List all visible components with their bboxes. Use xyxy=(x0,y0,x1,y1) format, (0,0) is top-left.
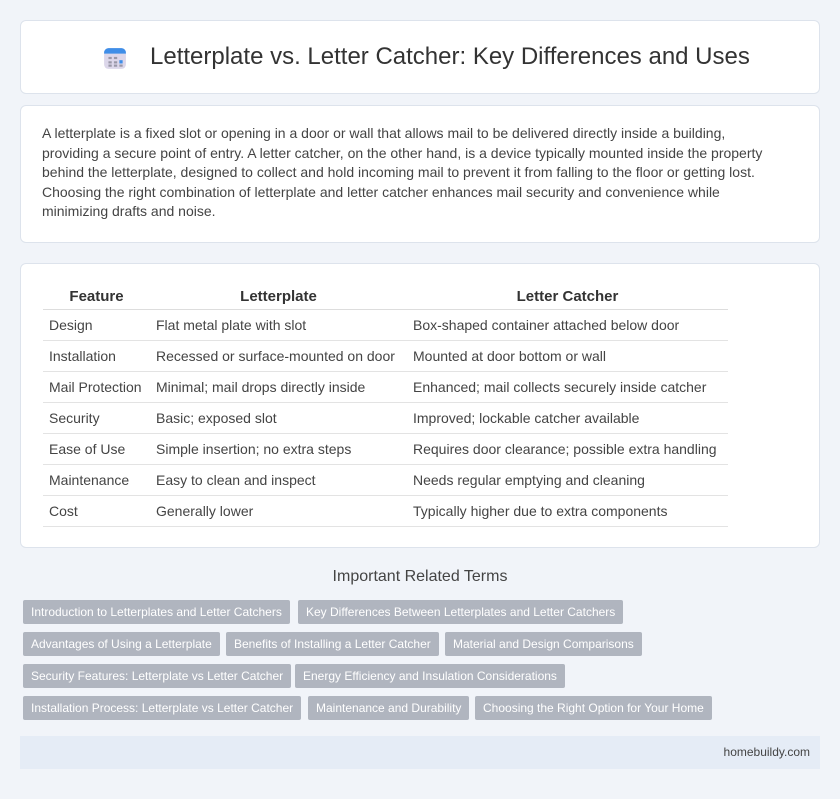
related terms tags: Energy Efficiency and Insulation Considerations xyxy=(303,669,557,683)
intro text card xyxy=(20,105,820,243)
related terms tags: Advantages of Using a Letterplate xyxy=(31,637,212,651)
related terms tags: Choosing the Right Option for Your Home xyxy=(483,701,704,715)
comparison table card: Easy to clean and inspect xyxy=(156,472,316,488)
related terms heading: Important Related Terms xyxy=(333,568,507,585)
comparison table card: Security xyxy=(49,410,100,426)
footer xyxy=(20,736,820,769)
comparison table card: Flat metal plate with slot xyxy=(156,317,306,333)
related terms tags: Benefits of Installing a Letter Catcher xyxy=(234,637,431,651)
comparison table card: Recessed or surface-mounted on door xyxy=(156,348,395,364)
related terms tags: Security Features: Letterplate vs Letter Catcher xyxy=(31,669,283,683)
comparison table card: Generally lower xyxy=(156,503,253,519)
comparison table card: Minimal; mail drops directly inside xyxy=(156,379,365,395)
comparison table card: Design xyxy=(49,317,93,333)
related terms tags: Introduction to Letterplates and Letter Catchers xyxy=(31,605,282,619)
title: Letterplate vs. Letter Catcher: Key Differences and Uses xyxy=(150,43,750,70)
comparison table card: Improved; lockable catcher available xyxy=(413,410,639,426)
comparison table card: Simple insertion; no extra steps xyxy=(156,441,351,457)
comparison table card: Box-shaped container attached below door xyxy=(413,317,679,333)
comparison table card: Enhanced; mail collects securely inside catcher xyxy=(413,379,706,395)
comparison table card: Mounted at door bottom or wall xyxy=(413,348,606,364)
intro text card: A letterplate is a fixed slot or opening in a door or wall that allows mail to be delivered directly inside a building, providing a secure point of entry. A letter catcher, on the other hand, is a device typically mounted inside the property behind the letterplate, designed to collect and hold incoming mail to prevent it from falling to the floor or getting lost. Choosing the right combination of letterplate and letter catcher enhances mail security and convenience while minimizing drafts and noise. xyxy=(42,125,762,219)
comparison table card: Typically higher due to extra components xyxy=(413,503,667,519)
comparison table card: Installation xyxy=(49,348,116,364)
comparison table card: Ease of Use xyxy=(49,441,125,457)
comparison table card: Feature xyxy=(69,288,124,305)
related terms tags: Installation Process: Letterplate vs Letter Catcher xyxy=(31,701,293,715)
header card xyxy=(20,20,820,94)
comparison table card: Cost xyxy=(49,503,78,519)
comparison table card: Mail Protection xyxy=(49,379,142,395)
comparison table card: Needs regular emptying and cleaning xyxy=(413,472,645,488)
footer: homebuildy.com xyxy=(724,745,810,759)
comparison table card: Requires door clearance; possible extra handling xyxy=(413,441,717,457)
comparison table card xyxy=(20,263,820,548)
icon: calendar xyxy=(104,48,126,69)
comparison table card: Letter Catcher xyxy=(517,288,618,305)
comparison table card: Letterplate xyxy=(240,288,317,305)
comparison table card: Maintenance xyxy=(49,472,129,488)
related terms tags: Maintenance and Durability xyxy=(316,701,461,715)
comparison table card: Basic; exposed slot xyxy=(156,410,277,426)
related terms tags: Key Differences Between Letterplates and Letter Catchers xyxy=(306,605,615,619)
related terms tags: Material and Design Comparisons xyxy=(453,637,634,651)
